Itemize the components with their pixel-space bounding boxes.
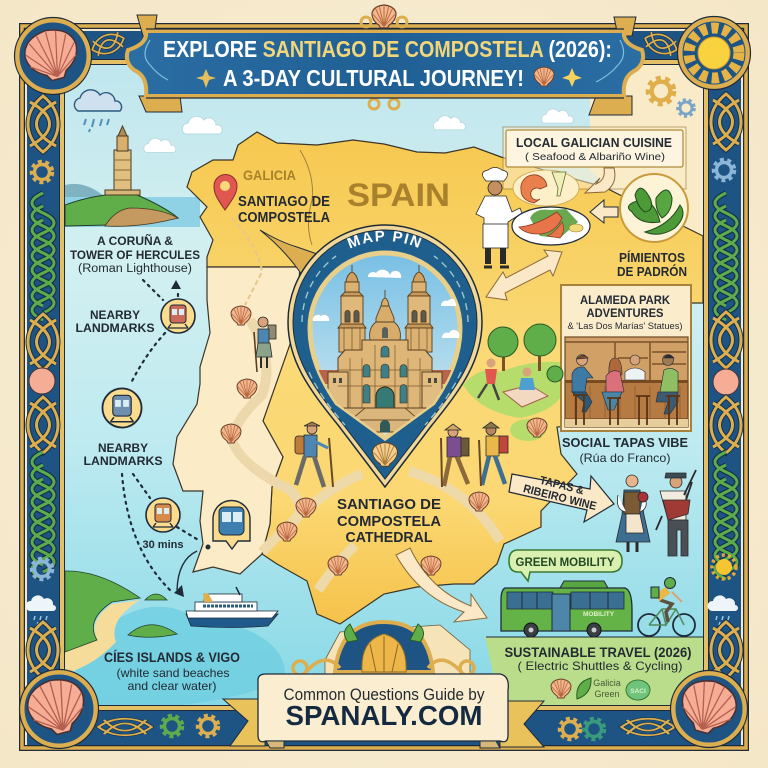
panel subtitle: ( Seafood & Albariño Wine) <box>525 151 665 163</box>
panel subtitle: & 'Las Dos Marías' Statues) <box>568 321 682 332</box>
panel heading: ALAMEDA PARK <box>580 293 670 307</box>
park grass <box>463 362 562 418</box>
map area <box>65 62 703 707</box>
label: Social Tapas: SOCIAL TAPAS VIBE <box>562 435 688 450</box>
arrow: Tapas and Ribeiro Wine: RIBEIRO WINE <box>522 483 598 513</box>
callout: Green Mobility <box>509 550 622 581</box>
bus <box>501 581 632 637</box>
ferry <box>186 587 278 628</box>
corner medallion: shell bottom-right <box>670 670 748 748</box>
eco badges: SACI <box>630 688 646 695</box>
bottom band ornaments <box>98 716 675 740</box>
rain cloud <box>74 90 122 132</box>
label: cathedral: COMPOSTELA <box>337 513 441 530</box>
icon: red map pin <box>214 175 237 210</box>
panel heading: LOCAL GALICIAN CUISINE <box>516 135 672 150</box>
arrow: Tapas and Ribeiro Wine <box>509 474 614 522</box>
website: SPANALY.COM <box>286 700 482 731</box>
banner swirls <box>145 40 624 82</box>
title banner <box>127 5 643 115</box>
dotted routes <box>122 280 200 592</box>
ornament shell crest <box>293 622 474 675</box>
label: Pimientos: PÍMIENTOS <box>619 250 685 265</box>
illustration: Tower of Hercules on headland <box>65 126 178 226</box>
label: Santiago de Compostela <box>238 194 330 226</box>
pin bottom shell <box>372 442 398 466</box>
banner plate <box>127 31 643 96</box>
corner medallion: sun top-right <box>678 16 750 90</box>
cream upper-right corner <box>590 62 703 240</box>
cyclist <box>638 578 695 636</box>
label: Pimientos <box>617 250 687 279</box>
corner medallion: shell bottom-left <box>20 670 98 748</box>
park scene <box>478 324 563 407</box>
scroll text: Common Questions Guide by <box>284 685 485 704</box>
label: cathedral: SANTIAGO DE <box>337 496 441 513</box>
A Coruña label <box>70 235 200 275</box>
gears upper right <box>648 78 694 116</box>
label: Cíes Islands: (white sand beaches <box>116 666 230 680</box>
seafood plate <box>512 207 590 245</box>
cream rock near ornament <box>324 624 470 674</box>
ribbon tails <box>223 699 265 746</box>
label: Cíes Islands: CÍES ISLANDS & VIGO <box>104 650 240 665</box>
label: Spain: SPAIN <box>347 177 450 213</box>
green ground strip <box>485 637 703 705</box>
arc label: Map Pin <box>303 241 467 323</box>
label: Cíes Islands <box>104 650 240 693</box>
pin band <box>293 230 477 479</box>
right band ornaments <box>707 94 741 678</box>
nearby landmarks labels: LANDMARKS <box>76 321 154 335</box>
scroll body <box>258 674 508 742</box>
Cíes islands and coast <box>65 571 177 672</box>
sea deep patch <box>74 607 285 707</box>
panel: Alameda and tapas <box>561 285 691 431</box>
nearby landmarks labels: NEARBY <box>90 308 140 322</box>
nearby landmarks labels: NEARBY <box>98 441 148 455</box>
distant hill <box>65 184 105 197</box>
pin inner rim <box>310 253 460 438</box>
title line 1: EXPLORE SANTIAGO DE COMPOSTELA (2026): <box>163 36 612 62</box>
pilgrim trails <box>232 218 500 590</box>
A Coruña label: A CORUÑA & <box>97 235 173 248</box>
arrowheads and node <box>171 280 210 597</box>
clouds <box>144 109 573 152</box>
label: Pimientos: DE PADRÓN <box>617 264 687 279</box>
title line 2: A 3-DAY CULTURAL JOURNEY! <box>223 65 524 91</box>
trail shells <box>221 306 547 575</box>
sea strip <box>65 197 200 227</box>
arrow: Tapas and Ribeiro Wine: TAPAS & <box>538 475 585 497</box>
ground line <box>486 636 703 638</box>
scroll curl <box>266 741 500 748</box>
ferry route <box>177 551 197 590</box>
banner shell and sparkle <box>534 67 582 87</box>
tapas bar scene <box>565 337 688 427</box>
left band ornaments <box>25 96 58 678</box>
eco badges <box>551 678 650 700</box>
panel heading <box>580 293 670 320</box>
Portugal landmass <box>173 267 300 574</box>
chef <box>476 168 522 267</box>
A Coruña label: (Roman Lighthouse) <box>78 263 192 275</box>
A Coruña label: TOWER OF HERCULES <box>70 250 200 262</box>
pin pointer <box>260 230 320 275</box>
sparkle left <box>196 69 216 88</box>
Spain landmass <box>187 132 703 624</box>
double arrow <box>486 250 562 300</box>
top band knots <box>89 30 680 58</box>
eco badges: Galicia <box>593 678 621 688</box>
trail arrow to green mobility <box>396 548 487 622</box>
Galicia border <box>300 150 312 245</box>
hiker upper <box>254 317 276 372</box>
musicians <box>616 470 696 556</box>
pin body <box>288 225 482 487</box>
banner outline <box>146 29 624 98</box>
arrow from panel to plate <box>585 168 615 193</box>
map pin medallion <box>260 224 483 488</box>
eco badges: Green <box>594 689 620 699</box>
pin band swirls <box>302 256 468 425</box>
label: 30 mins: 30 mins <box>142 539 184 551</box>
shrimp and wine <box>513 170 579 206</box>
label: Sustainable Travel <box>504 645 692 673</box>
label: Sustainable Travel: ( Electric Shuttles & Cycling) <box>518 659 682 673</box>
label: Cíes Islands: and clear water) <box>128 679 216 693</box>
label: cathedral <box>337 496 441 546</box>
corner medallion: shell top-left <box>14 18 92 94</box>
sky and sea <box>65 62 703 705</box>
arrow pepper to plate <box>590 200 618 223</box>
top shell ornament <box>361 5 407 109</box>
label: cathedral: CATHEDRAL <box>346 529 432 546</box>
shell patch grass <box>510 419 546 441</box>
callout: Green Mobility: GREEN MOBILITY <box>516 555 614 569</box>
train icons <box>102 299 195 532</box>
bottom ornament and scroll <box>223 622 544 748</box>
panel title plate <box>506 130 683 167</box>
pilgrims pair <box>441 422 508 487</box>
tunnel train <box>213 500 250 549</box>
label: Social Tapas: (Rúa do Franco) <box>580 451 670 465</box>
label: Social Tapas <box>562 435 688 465</box>
nearby landmarks labels <box>76 308 162 468</box>
panel: Local Galician Cuisine <box>503 127 686 189</box>
banner scrolls <box>137 15 636 115</box>
hiker lower left <box>295 422 333 487</box>
cathedral <box>313 265 460 432</box>
pepper medallion <box>620 174 688 242</box>
panel heading: ADVENTURES <box>586 306 664 320</box>
bus: MOBILITY <box>583 611 615 618</box>
label: Santiago de Compostela: COMPOSTELA <box>238 210 330 226</box>
nearby landmarks labels: LANDMARKS <box>84 454 162 468</box>
label: Santiago de Compostela: SANTIAGO DE <box>238 194 330 210</box>
labels: Galicia: GALICIA <box>243 168 296 183</box>
map pin medallion: MAP PIN <box>347 230 422 248</box>
label: Sustainable Travel: SUSTAINABLE TRAVEL (2026) <box>504 645 692 660</box>
